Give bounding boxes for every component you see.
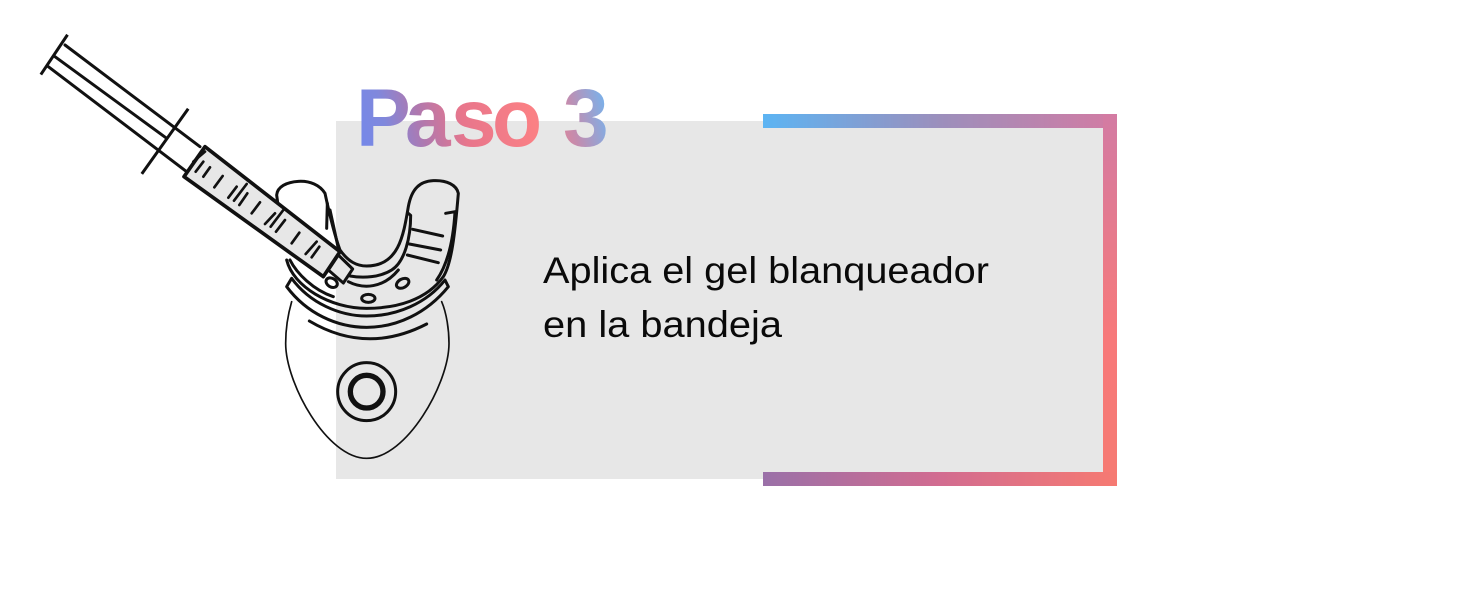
gradient frame xyxy=(763,114,1117,486)
device body xyxy=(286,302,449,458)
text block: instruction xyxy=(543,250,989,345)
text block: instruction: Aplica el gel blanqueador xyxy=(543,250,989,291)
device curved line xyxy=(309,321,427,339)
heading: Paso 3: Paso 3 xyxy=(356,73,609,164)
syringe barrel xyxy=(184,147,340,277)
icon: whitening light device with tray xyxy=(277,181,458,458)
device collar xyxy=(287,278,448,327)
panel: grey background xyxy=(336,121,1103,479)
syringe markings xyxy=(193,152,319,257)
syringe nozzle xyxy=(328,255,353,283)
text block: instruction: en la bandeja xyxy=(543,304,782,345)
mouth tray xyxy=(277,181,458,308)
icon: syringe xyxy=(42,36,353,283)
syringe plunger xyxy=(42,36,200,173)
power button xyxy=(338,363,396,421)
